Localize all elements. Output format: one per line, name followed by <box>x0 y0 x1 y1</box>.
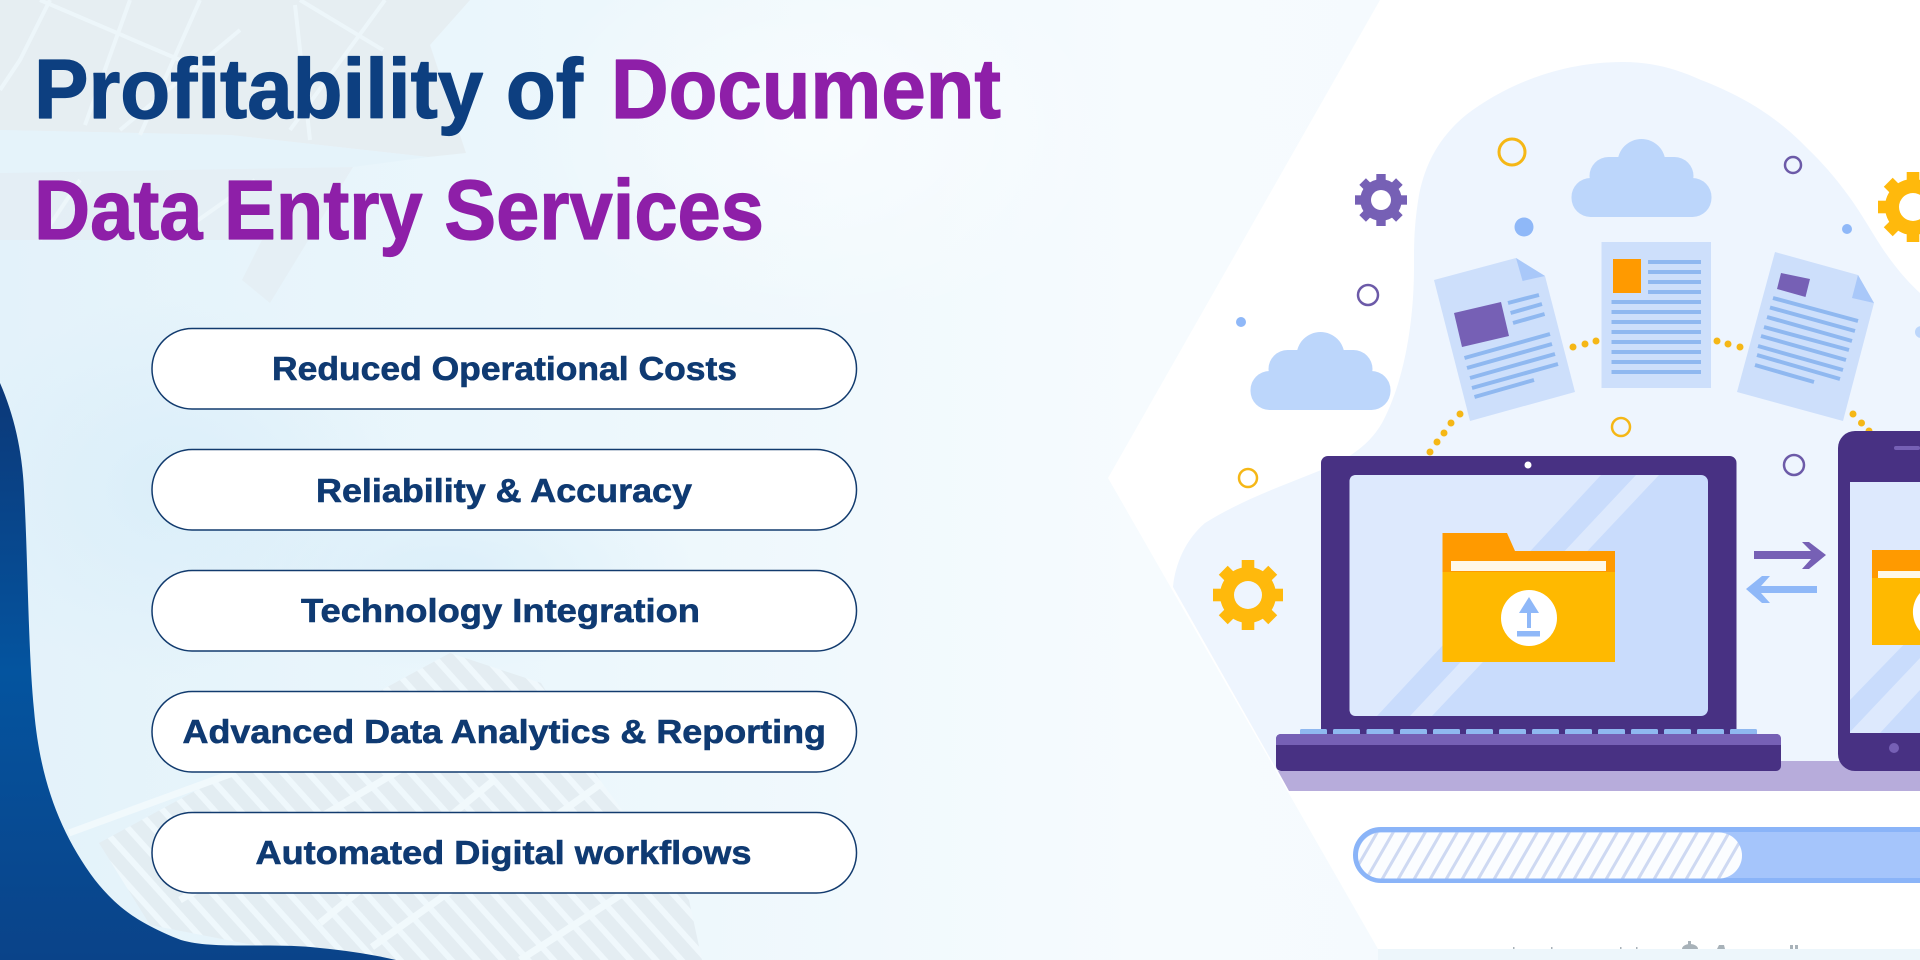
decorative rings and dots <box>1236 139 1920 487</box>
pill: advanced analytics: Advanced Data Analytics & Reporting <box>182 713 826 750</box>
document: center <box>1602 242 1711 388</box>
pill: advanced analytics <box>152 692 856 772</box>
title line 1: Profitability of <box>34 42 584 136</box>
icon: yellow gear right <box>1878 172 1920 242</box>
pill: technology integration: Technology Integration <box>301 592 700 629</box>
arrow: sync right <box>1754 542 1826 569</box>
left blue wave <box>0 383 396 960</box>
document: right <box>1737 252 1874 421</box>
laptop base <box>1276 734 1781 771</box>
pill: automated workflows <box>152 812 856 893</box>
shelf <box>1278 761 1920 791</box>
phone <box>1838 431 1920 771</box>
arrow: sync left <box>1746 576 1817 603</box>
pill: reliability and accuracy: Reliability & Accuracy <box>316 472 693 509</box>
laptop lid <box>1321 456 1736 741</box>
progress bar <box>1356 830 1920 880</box>
illustration backdrop blob <box>1173 62 1920 790</box>
title line 2: Data Entry Services <box>34 163 764 257</box>
laptop <box>1276 456 1781 771</box>
keyboard keys <box>1300 729 1757 735</box>
benefits list <box>152 328 856 893</box>
icon: yellow gear left <box>1213 560 1283 630</box>
pill: reduced operational costs: Reduced Operational Costs <box>272 350 737 387</box>
background: bottom strip <box>1378 949 1920 960</box>
pill: automated workflows: Automated Digital workflows <box>256 834 752 871</box>
background: white hexagonal panel <box>1108 0 1920 949</box>
background: curved tower <box>69 653 702 960</box>
cloud: left <box>1250 332 1390 410</box>
background: steel roof structure <box>0 0 470 303</box>
phone folder <box>1872 550 1920 645</box>
icon: purple gear <box>1355 174 1407 226</box>
pill: reduced operational costs <box>152 328 856 409</box>
dotted connectors <box>1426 338 1872 456</box>
cloud: top <box>1572 139 1712 217</box>
folder icon <box>1442 533 1615 662</box>
laptop screen <box>1350 475 1708 716</box>
cut-off logo fragment <box>1513 941 1798 949</box>
title highlight: Document <box>611 42 1001 136</box>
pill: technology integration <box>152 570 856 651</box>
pill: reliability and accuracy <box>152 450 856 530</box>
title <box>34 42 1001 257</box>
document: left <box>1434 258 1575 421</box>
